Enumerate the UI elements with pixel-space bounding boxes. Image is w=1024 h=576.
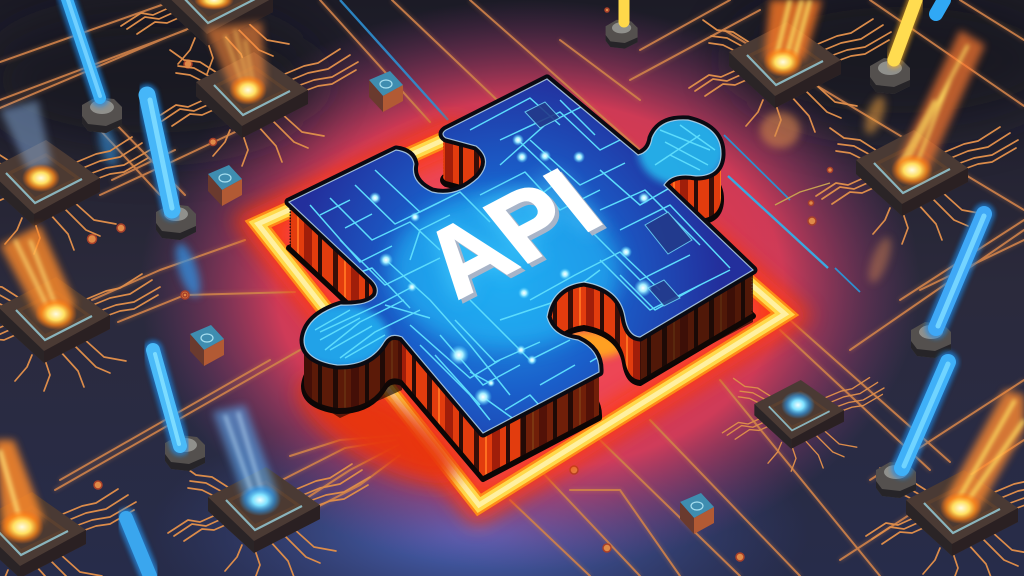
chip: bottom centre with blue beam bbox=[168, 405, 370, 576]
puzzle piece bbox=[289, 79, 753, 479]
chip: top left edge bbox=[121, 0, 323, 74]
pillar: blue bottom bbox=[126, 518, 150, 576]
puzzle ground shadow and glow bbox=[286, 331, 625, 503]
pillar: blue lower left bbox=[153, 350, 205, 471]
chip: bottom right with flame bbox=[866, 390, 1024, 576]
circuit traces bbox=[300, 90, 730, 420]
chip: right with flame bbox=[816, 30, 1018, 244]
puzzle side walls bbox=[289, 83, 753, 479]
pillar: blue left bbox=[147, 95, 196, 240]
chip: top right with flame bbox=[689, 0, 891, 136]
small component: bottom centre cube bbox=[680, 493, 714, 534]
pillar: blue top right bbox=[936, 0, 944, 14]
chip: mid left with flame bbox=[0, 225, 160, 391]
pillar: blue right bbox=[911, 214, 984, 358]
chip texture panels bbox=[525, 102, 692, 306]
API label: API bbox=[396, 151, 619, 319]
small component: top centre cube bbox=[369, 71, 403, 112]
API label: API bbox=[399, 149, 621, 317]
puzzle top face bbox=[289, 79, 753, 433]
chip: left with pale beam bbox=[0, 100, 150, 254]
chip: upper left with flame bbox=[156, 22, 358, 166]
API label: API bbox=[403, 153, 625, 321]
small component: lower left cube bbox=[190, 325, 224, 366]
chip: lower right with blue light bbox=[722, 378, 884, 471]
small component: upper left cube bbox=[208, 165, 242, 206]
copper terminals bbox=[88, 8, 832, 561]
board reflections bbox=[95, 93, 896, 299]
dark wall shading bbox=[304, 270, 753, 458]
pillar: blue top left bbox=[66, 0, 122, 133]
pillar: yellow top right bbox=[870, 0, 916, 94]
pillar: blue lower right bbox=[876, 362, 948, 498]
glowing frame bbox=[258, 137, 785, 505]
knob highlights bbox=[638, 114, 726, 186]
circuit nodes bbox=[369, 134, 652, 406]
pillar: yellow top centre bbox=[606, 0, 638, 49]
chip: bottom left with flame bbox=[0, 440, 136, 576]
